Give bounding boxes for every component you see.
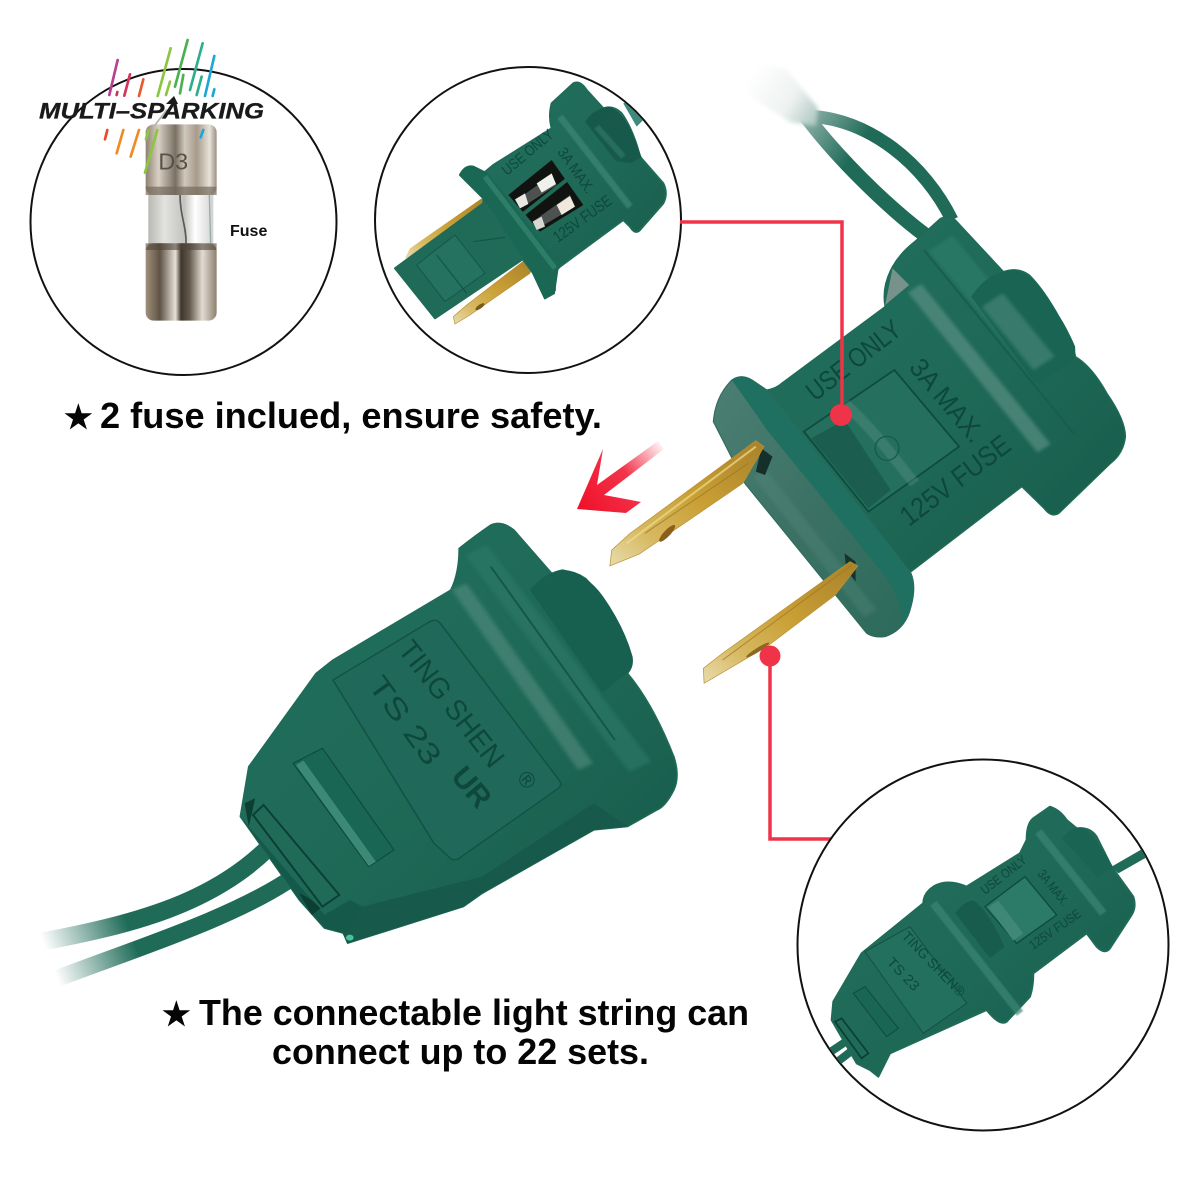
circle: plug with opened fuse compartment [375, 67, 681, 373]
socket moulded text: TS 23 [361, 670, 447, 772]
rear knob [972, 271, 1075, 382]
fuse label: Fuse [230, 223, 267, 240]
caption: connectable sets: connect up to 22 sets. [272, 1031, 649, 1072]
prong: upper [610, 441, 764, 566]
logo: Multi-Sparking [39, 40, 264, 173]
socket rib highlight [459, 587, 585, 767]
prong: lower [703, 562, 858, 683]
plug front plate [713, 377, 914, 637]
plug moulded text: USE ONLY [800, 314, 907, 407]
icon: connected plug and socket [823, 807, 1147, 1077]
caption: connectable sets: The connectable light string can [199, 992, 749, 1033]
large plug [610, 217, 1125, 683]
connector line: plug to fuse circle [680, 222, 852, 426]
icon: glass fuse [146, 124, 217, 321]
rear ridge highlight [915, 288, 1044, 448]
logo wordmark: MULTI–SPARKING [39, 98, 264, 124]
label recess [333, 620, 561, 860]
circle: mated plug and socket [798, 760, 1168, 1130]
plug moulded text: 3A MAX. [903, 353, 991, 448]
fuse holder moulded text: USE ONLY [499, 126, 557, 179]
wires: plug rear [735, 62, 952, 235]
caption: connectable sets [162, 992, 749, 1072]
fuse window [804, 370, 959, 512]
cable clamp [240, 763, 362, 933]
icon: small plug [395, 82, 666, 324]
fuse holder moulded text: 3A MAX. [554, 145, 597, 197]
mated connector moulded text: TS 23 [884, 954, 923, 994]
plug moulded text [800, 314, 1016, 532]
socket moulded text [361, 635, 542, 815]
arrow: pull direction [577, 441, 664, 513]
connector line: prong to mated circle [760, 646, 832, 839]
caption: fuse safety: ★ [64, 399, 93, 435]
socket knob [531, 570, 632, 692]
fuse holder moulded text: 125V FUSE [550, 193, 615, 246]
mated connector moulded text: 3A MAX. [1035, 867, 1072, 909]
plug body [767, 217, 1125, 572]
fuse holder moulded text [499, 126, 615, 246]
caption: connectable sets: ★ [162, 996, 191, 1032]
plug moulded text: 125V FUSE [894, 429, 1016, 532]
mated connector moulded text: TING SHEN® [899, 928, 969, 1000]
mated connector moulded text: USE ONLY [978, 852, 1030, 897]
mated connector moulded text: 125V FUSE [1026, 906, 1084, 952]
circle: fuse closeup [30, 69, 336, 375]
socket underside wall [337, 803, 628, 943]
socket moulded text: ® [512, 766, 542, 794]
icon: glass fuse: D3 [158, 148, 188, 174]
wires: socket rear [40, 848, 292, 985]
raised tab [293, 748, 394, 867]
caption: fuse safety: 2 fuse inclued, ensure safety. [100, 395, 602, 436]
large socket [240, 523, 677, 943]
mated connector moulded text [884, 852, 1084, 1000]
socket moulded text: UR [445, 760, 498, 815]
socket moulded text: TING SHEN [391, 635, 510, 774]
